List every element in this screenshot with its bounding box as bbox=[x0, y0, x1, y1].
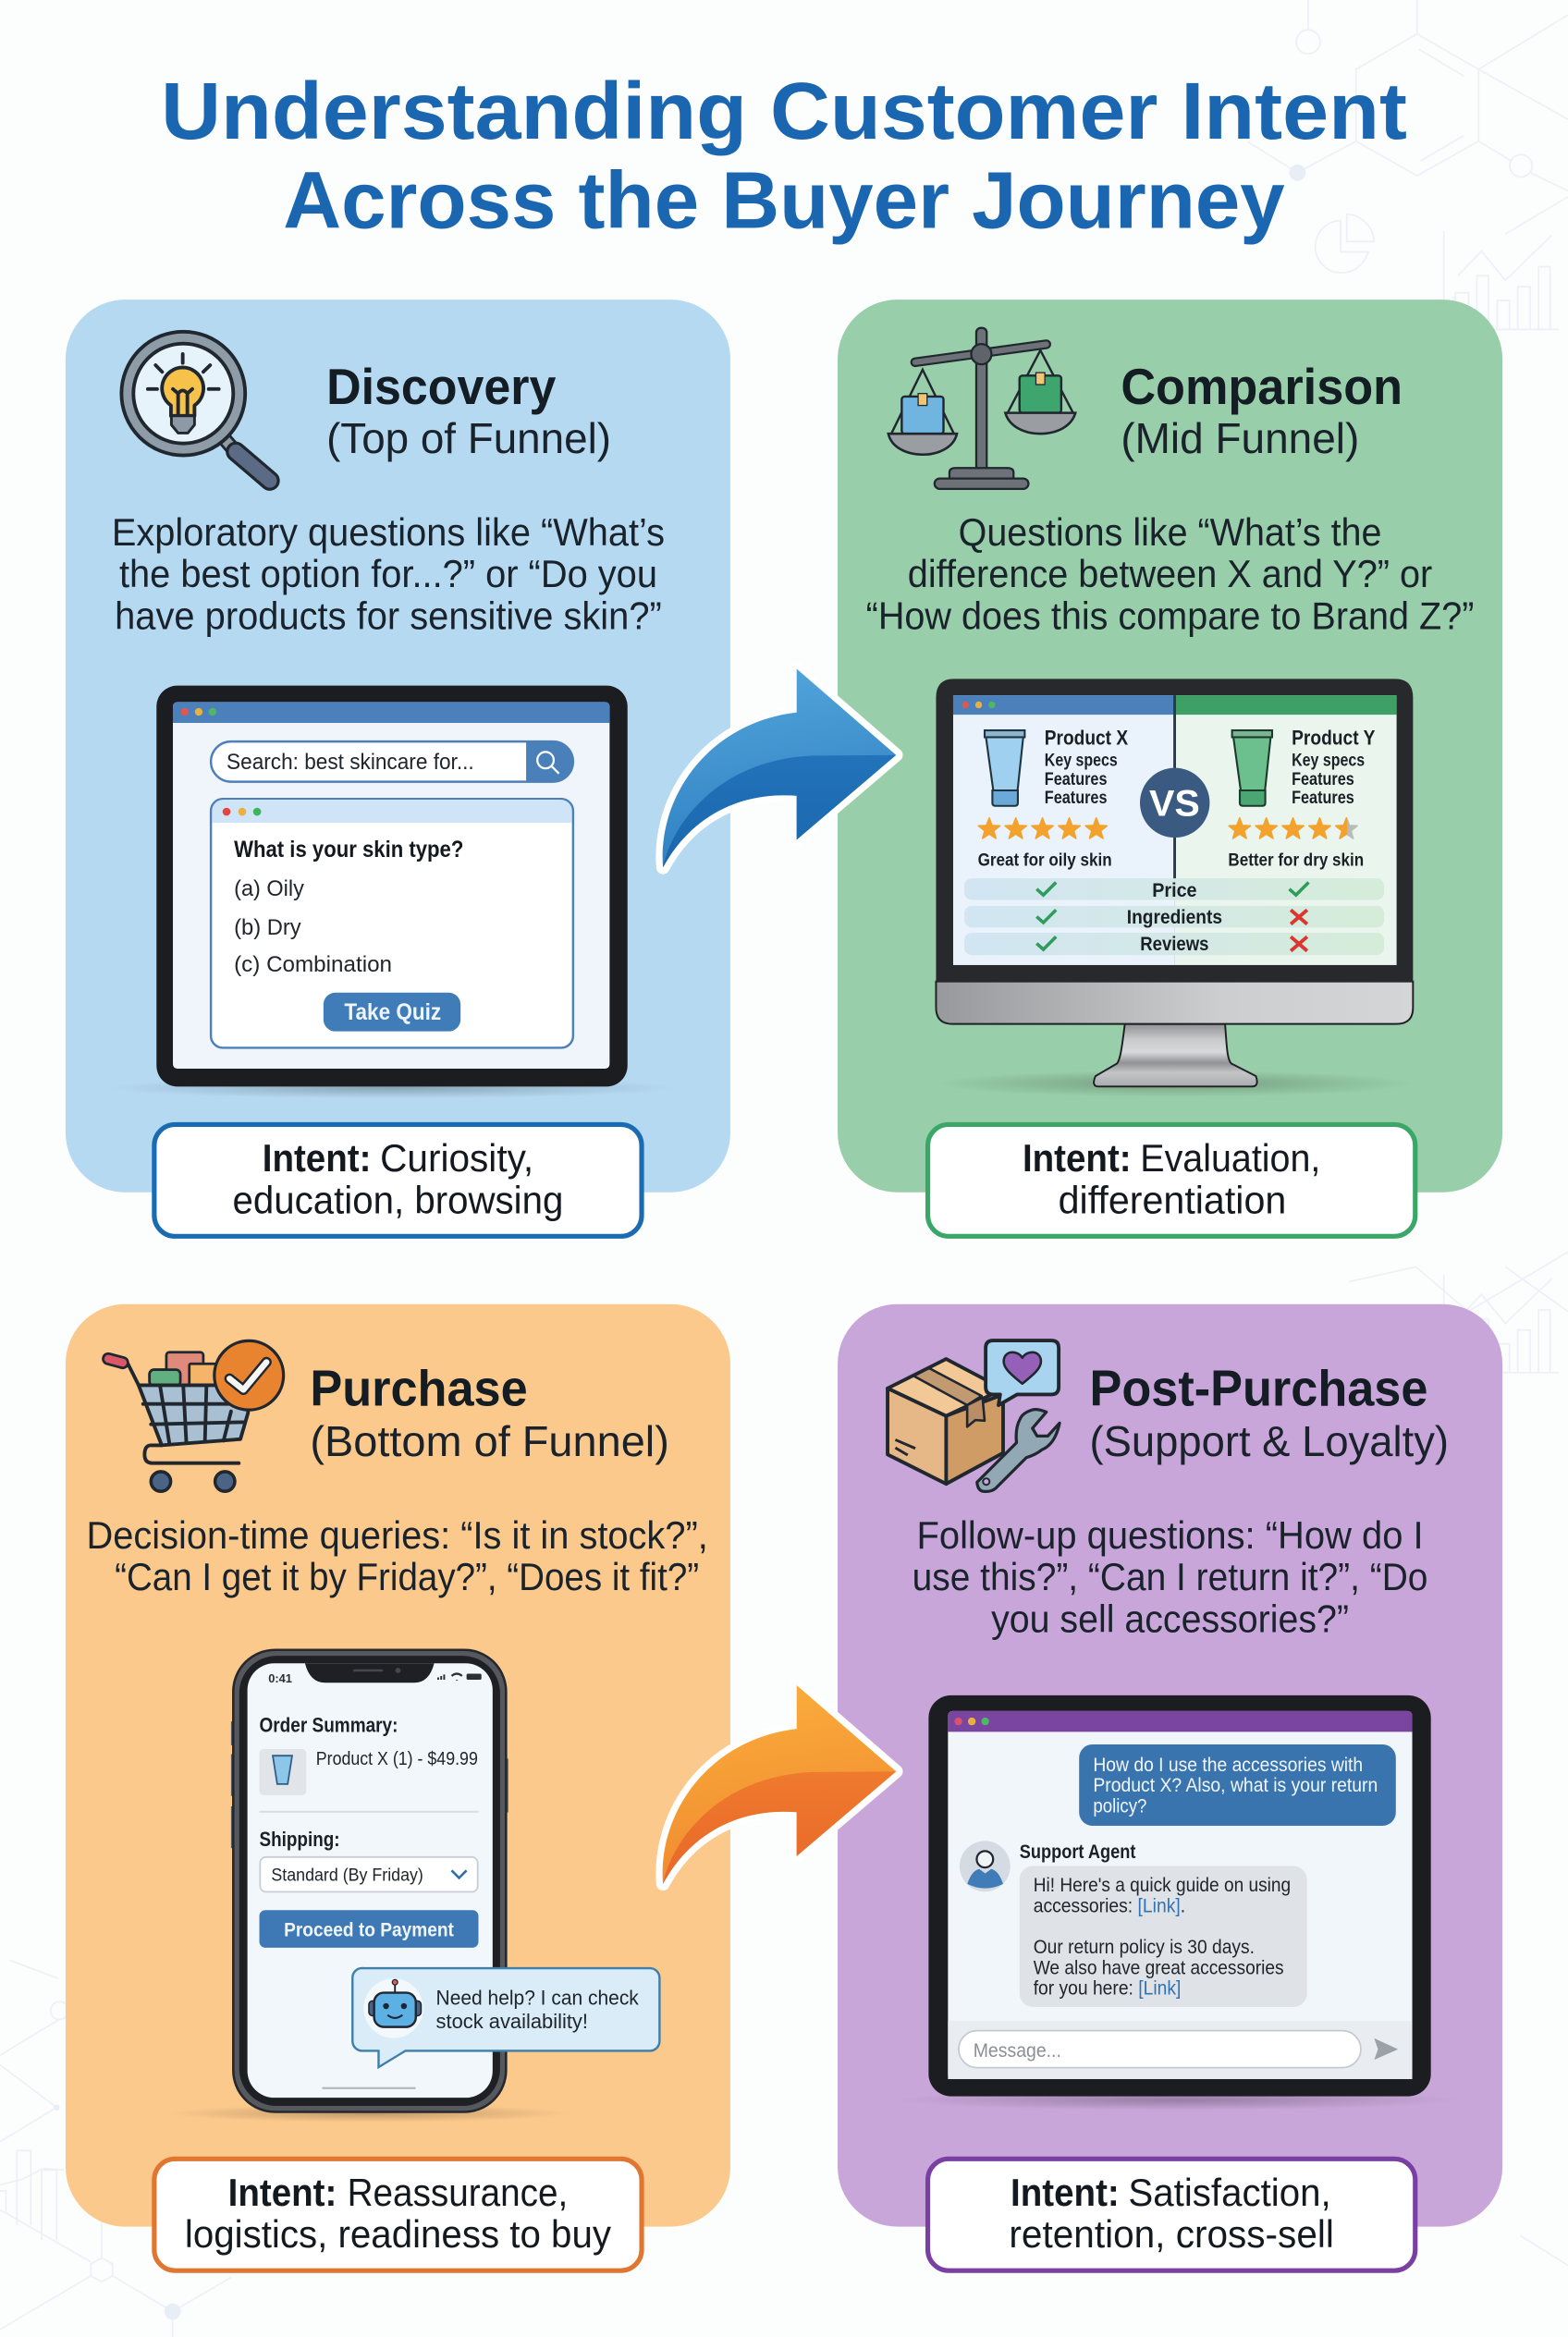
order summary bbox=[260, 1713, 479, 1813]
comparison description: difference between X and Y?” or bbox=[908, 552, 1432, 595]
comparison table bbox=[964, 878, 1384, 955]
quiz card: Take Quiz bbox=[344, 999, 441, 1025]
discovery card background bbox=[66, 300, 730, 1193]
support agent reply: for you here: [Link] bbox=[1034, 1977, 1181, 1999]
title bbox=[161, 67, 1407, 246]
product x column bbox=[978, 726, 1129, 871]
post-purchase heading: (Support & Loyalty) bbox=[1089, 1417, 1449, 1465]
search bar: Search: best skincare for... bbox=[227, 750, 474, 775]
vs badge: VS bbox=[1149, 783, 1200, 825]
product x column: Key specs bbox=[1045, 751, 1118, 771]
support agent reply: We also have great accessories bbox=[1034, 1957, 1284, 1978]
comparison heading: (Mid Funnel) bbox=[1121, 414, 1359, 462]
post-purchase description: Follow-up questions: “How do I bbox=[916, 1513, 1424, 1557]
intent box: comparison: Evaluation, bbox=[1140, 1136, 1320, 1180]
customer message: Product X? Also, what is your return bbox=[1093, 1775, 1378, 1796]
product y column: Product Y bbox=[1292, 726, 1376, 749]
purchase heading bbox=[310, 1359, 669, 1465]
tablet with support chat bbox=[928, 1695, 1431, 2097]
product x column: Product X bbox=[1045, 726, 1129, 749]
support agent reply bbox=[1020, 1841, 1307, 2007]
arrow: discovery to comparison bbox=[663, 668, 896, 867]
icon: magnifier with light bulb bbox=[121, 332, 270, 481]
post-purchase card background bbox=[838, 1304, 1502, 2227]
discovery heading: (Top of Funnel) bbox=[326, 414, 611, 462]
customer message: policy? bbox=[1093, 1795, 1146, 1817]
icon: balance scale bbox=[888, 328, 1075, 489]
comparison card background bbox=[838, 300, 1502, 1193]
product x column: Features bbox=[1045, 769, 1108, 789]
support agent reply: Our return policy is 30 days. bbox=[1034, 1937, 1255, 1958]
intent box: discovery: Curiosity, bbox=[380, 1136, 533, 1180]
comparison description bbox=[866, 510, 1474, 637]
phone with order summary bbox=[231, 1650, 508, 2112]
product y column: Key specs bbox=[1292, 751, 1365, 771]
post-purchase description: you sell accessories?” bbox=[991, 1597, 1349, 1640]
icon: box, heart bubble, wrench bbox=[888, 1340, 1060, 1491]
customer message bbox=[1079, 1744, 1396, 1826]
quiz card: (b) Dry bbox=[234, 915, 302, 940]
comparison heading bbox=[1121, 358, 1403, 462]
title: Understanding Customer Intent bbox=[161, 67, 1407, 156]
monitor with comparison bbox=[936, 679, 1413, 1086]
comparison table: Price bbox=[1152, 880, 1197, 901]
panel: purchase bbox=[66, 1304, 730, 2270]
post-purchase heading: Post-Purchase bbox=[1089, 1359, 1427, 1416]
purchase description bbox=[87, 1513, 708, 1598]
title: Across the Buyer Journey bbox=[283, 156, 1285, 246]
icon: robot bbox=[369, 1979, 421, 2027]
arrow: purchase to post-purchase bbox=[663, 1685, 896, 1884]
discovery description: Exploratory questions like “What’s bbox=[112, 510, 665, 554]
purchase heading: (Bottom of Funnel) bbox=[310, 1417, 669, 1465]
icon: shopping cart with check bbox=[102, 1340, 284, 1491]
intent box: post-purchase: Intent: bbox=[1011, 2171, 1120, 2214]
order summary: Product X (1) - $49.99 bbox=[316, 1749, 478, 1769]
vs badge bbox=[1140, 768, 1209, 838]
message input bbox=[948, 2021, 1413, 2079]
background dots bbox=[54, 165, 1305, 2319]
tablet shadow bbox=[894, 2089, 1461, 2111]
intent box: post-purchase: retention, cross-sell bbox=[1009, 2212, 1334, 2256]
intent box: discovery: Intent: bbox=[263, 1136, 371, 1180]
customer message: How do I use the accessories with bbox=[1093, 1755, 1363, 1776]
chatbot bubble bbox=[352, 1968, 659, 2067]
tablet shadow bbox=[109, 1078, 675, 1098]
comparison table: Ingredients bbox=[1127, 907, 1222, 928]
intent box: discovery: education, browsing bbox=[232, 1178, 563, 1221]
proceed to payment button: Proceed to Payment bbox=[284, 1919, 454, 1940]
intent box: comparison bbox=[928, 1124, 1415, 1236]
quiz card: (a) Oily bbox=[234, 876, 305, 901]
phone with order summary: 0:41 bbox=[268, 1671, 292, 1685]
chatbot bubble: stock availability! bbox=[436, 2010, 588, 2033]
message input: Message... bbox=[974, 2040, 1061, 2062]
quiz card: What is your skin type? bbox=[234, 837, 463, 863]
proceed to payment button bbox=[260, 1910, 479, 1948]
quiz card: (c) Combination bbox=[234, 952, 392, 977]
shipping selector: Standard (By Friday) bbox=[271, 1866, 423, 1886]
comparison heading: Comparison bbox=[1121, 358, 1403, 415]
shipping selector: Shipping: bbox=[260, 1828, 340, 1851]
discovery description: have products for sensitive skin?” bbox=[115, 593, 662, 637]
purchase description: “Can I get it by Friday?”, “Does it fit?” bbox=[115, 1555, 699, 1598]
comparison description: Questions like “What’s the bbox=[959, 510, 1381, 554]
post-purchase description: use this?”, “Can I return it?”, “Do bbox=[913, 1555, 1427, 1598]
comparison description: “How does this compare to Brand Z?” bbox=[866, 593, 1474, 637]
post-purchase description bbox=[913, 1513, 1427, 1640]
intent box: post-purchase bbox=[928, 2159, 1415, 2270]
product y column: Features bbox=[1292, 769, 1354, 789]
post-purchase heading bbox=[1089, 1359, 1449, 1465]
discovery heading bbox=[326, 358, 611, 462]
discovery description bbox=[112, 510, 665, 637]
discovery description: the best option for...?” or “Do you bbox=[119, 552, 657, 595]
comparison table: Reviews bbox=[1140, 934, 1208, 955]
intent box: comparison: Intent: bbox=[1023, 1136, 1132, 1180]
quiz card bbox=[211, 799, 573, 1047]
purchase card background bbox=[66, 1304, 730, 2227]
support agent reply: Support Agent bbox=[1020, 1841, 1135, 1863]
discovery heading: Discovery bbox=[326, 358, 557, 415]
panel: comparison bbox=[838, 300, 1502, 1236]
phone shadow bbox=[168, 2104, 570, 2123]
product y column: Better for dry skin bbox=[1228, 850, 1364, 871]
intent box: purchase: logistics, readiness to buy bbox=[185, 2212, 611, 2256]
product y column bbox=[1228, 726, 1376, 871]
intent box: post-purchase: Satisfaction, bbox=[1128, 2171, 1331, 2214]
search bar bbox=[211, 741, 573, 782]
product x column: Features bbox=[1045, 788, 1108, 808]
order summary: Order Summary: bbox=[260, 1713, 398, 1736]
icon: agent avatar bbox=[960, 1841, 1011, 1891]
purchase heading: Purchase bbox=[310, 1359, 528, 1416]
support agent reply: Hi! Here's a quick guide on using bbox=[1034, 1875, 1291, 1896]
intent box: discovery bbox=[154, 1124, 642, 1236]
monitor stand bbox=[1094, 1024, 1257, 1086]
intent box: purchase: Intent: bbox=[228, 2171, 337, 2214]
product x column: Great for oily skin bbox=[978, 850, 1112, 871]
monitor shadow bbox=[936, 1071, 1413, 1097]
intent box: purchase bbox=[154, 2159, 642, 2270]
intent box: comparison: differentiation bbox=[1059, 1178, 1286, 1221]
intent box: purchase: Reassurance, bbox=[348, 2171, 568, 2214]
chatbot bubble: Need help? I can check bbox=[436, 1986, 639, 2009]
product y column: Features bbox=[1292, 788, 1354, 808]
panel: post-purchase bbox=[838, 1304, 1502, 2270]
panel: discovery bbox=[66, 300, 730, 1236]
support agent reply: accessories: [Link]. bbox=[1034, 1895, 1185, 1916]
purchase description: Decision-time queries: “Is it in stock?”, bbox=[87, 1513, 708, 1557]
tablet with quiz bbox=[156, 686, 628, 1086]
shipping selector bbox=[260, 1828, 478, 1892]
